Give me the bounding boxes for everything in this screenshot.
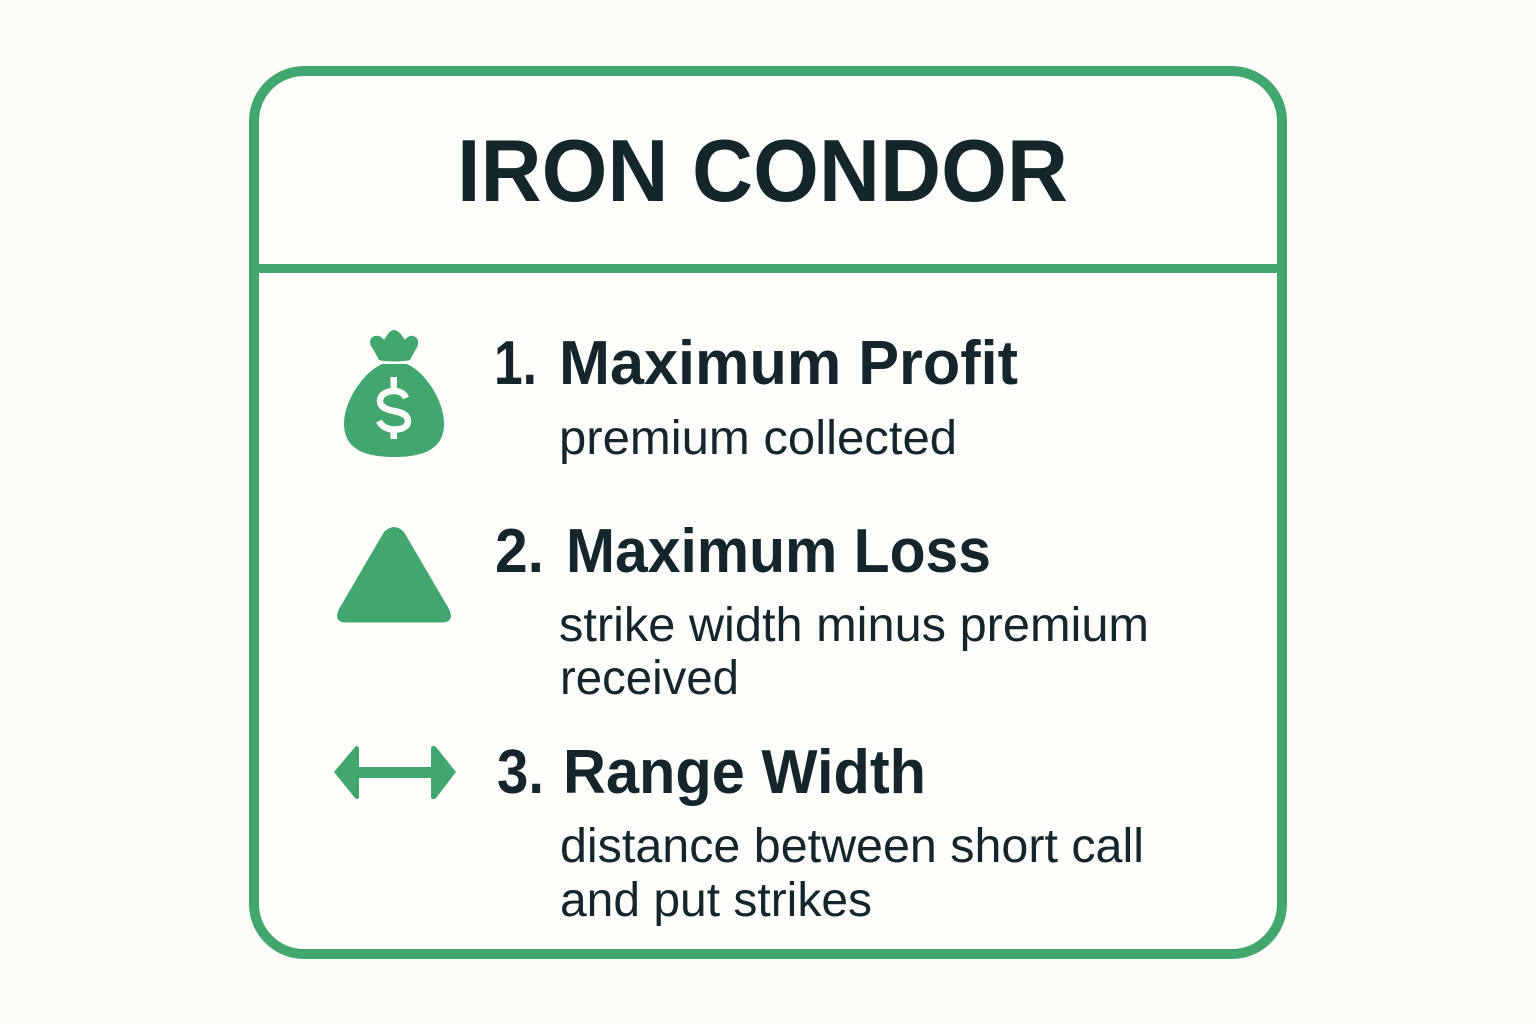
item 3: range width xyxy=(334,738,1144,927)
text: range width description xyxy=(560,820,1144,927)
heading: range width: Range Width xyxy=(563,738,926,807)
panel: iron condor card xyxy=(254,71,1282,954)
heading: maximum profit: 1. xyxy=(494,329,537,398)
text: strike width description: strike width minus premium xyxy=(559,599,1149,652)
item 2: maximum loss xyxy=(337,517,1149,705)
title: IRON CONDOR xyxy=(457,121,1068,220)
icon: double arrow xyxy=(334,746,456,799)
heading: maximum loss: 2. xyxy=(495,517,544,586)
icon: triangle xyxy=(337,527,451,622)
heading: maximum profit: Maximum Profit xyxy=(559,329,1018,398)
text: range width description: distance between short call xyxy=(560,820,1144,873)
text: strike width description: received xyxy=(560,652,739,705)
text: premium collected: premium collected xyxy=(559,412,957,465)
item 1: maximum profit xyxy=(344,329,1018,465)
icon: money bag xyxy=(344,330,444,457)
heading: range width: 3. xyxy=(497,738,544,807)
text: range width description: and put strikes xyxy=(560,874,872,927)
text: strike width description xyxy=(559,599,1149,705)
heading: maximum loss: Maximum Loss xyxy=(566,517,991,586)
